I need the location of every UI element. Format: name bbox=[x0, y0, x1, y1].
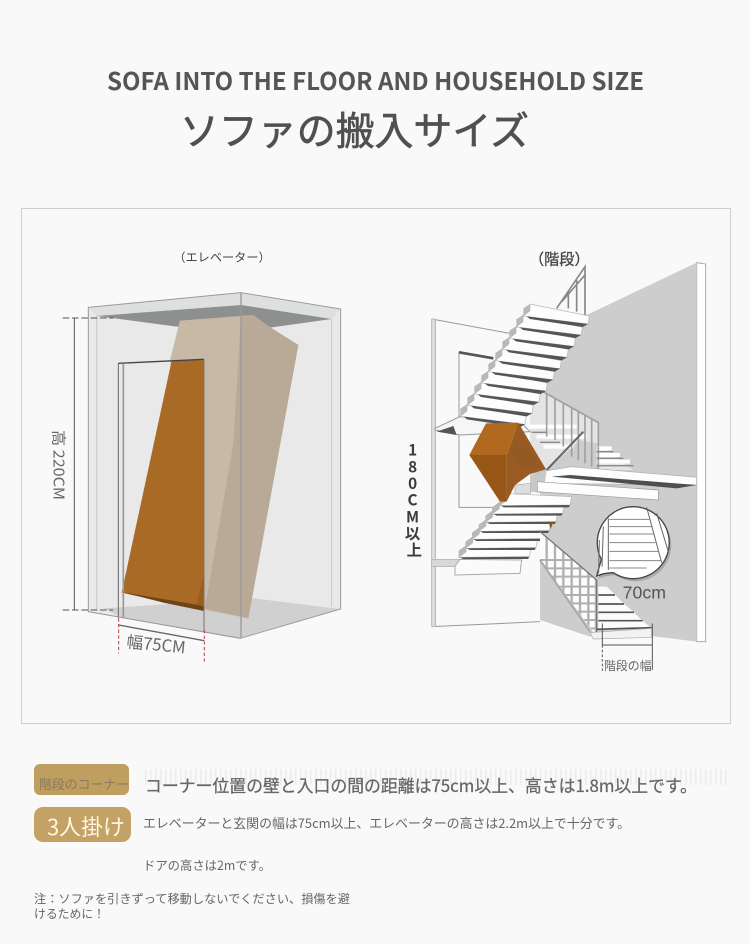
elevator cabin body bbox=[88, 293, 341, 638]
panel: elevator diagram bbox=[48, 249, 341, 663]
label: stairs: （階段） bbox=[529, 248, 590, 270]
top railing bbox=[557, 267, 585, 315]
left wall outline bbox=[432, 319, 540, 627]
height dimension line bbox=[63, 318, 113, 610]
label: width 75cm: 幅75CM bbox=[125, 628, 187, 659]
elevator floor bbox=[103, 598, 340, 637]
middle railing and back flight bbox=[530, 390, 633, 470]
text: corner requirement: コーナー位置の壁と入口の間の距離は75cm以上、高さは1.8m以上です。 bbox=[145, 772, 697, 797]
upper stair flight bbox=[460, 304, 589, 427]
elevator box edges bbox=[88, 293, 341, 638]
label: elevator: （エレベーター） bbox=[173, 249, 271, 266]
text: note: けるために！ bbox=[34, 905, 105, 922]
label: 180cm or more: M bbox=[406, 505, 419, 527]
title: japanese heading: ソファの搬入サイズ bbox=[180, 101, 529, 157]
text: note bbox=[34, 890, 350, 922]
label: 180cm or more: 0 bbox=[408, 472, 417, 494]
label: height 220cm: 高 220CM bbox=[48, 430, 69, 500]
title: english heading: SOFA INTO THE FLOOR AND HOUSEHOLD SIZE bbox=[107, 63, 644, 98]
upper landing bbox=[435, 417, 530, 435]
badge: stair corner: 階段のコーナー bbox=[39, 774, 129, 793]
label: 180cm or more: 1 bbox=[408, 439, 417, 461]
label: 180cm or more: 上 bbox=[407, 539, 422, 561]
label: 70cm: 70cm bbox=[623, 582, 666, 602]
width dimension line bbox=[119, 618, 204, 663]
label: 180cm or more: 以 bbox=[405, 522, 421, 544]
panel: stairs diagram bbox=[405, 248, 706, 674]
lower stair flight bbox=[432, 494, 572, 575]
sofa box behind door bbox=[170, 315, 298, 618]
label: 180cm or more: C bbox=[408, 489, 418, 511]
label: 180cm or more: 8 bbox=[408, 455, 417, 477]
background artifact behind first line bbox=[145, 769, 730, 785]
door frame bbox=[118, 359, 204, 632]
callout bubble: stair width bbox=[597, 507, 671, 581]
badge: stair corner bbox=[34, 764, 129, 795]
label: stair width: 階段の幅 bbox=[604, 657, 652, 674]
stair width dimension bbox=[602, 623, 652, 672]
badge: three seater: 3人掛け bbox=[47, 810, 125, 842]
panel: diagram frame bbox=[22, 208, 730, 724]
elevator ceiling bbox=[88, 293, 341, 330]
lower railing grid bbox=[540, 527, 597, 640]
text: note: 注：ソファを引きずって移動しないでください、損傷を避 bbox=[34, 890, 350, 907]
lower right stair steps bbox=[590, 587, 652, 639]
main landing slab bbox=[515, 467, 697, 500]
right grey wall bbox=[540, 263, 706, 642]
sofa box through door bbox=[122, 359, 204, 611]
orange sofa box on stairs bbox=[469, 423, 553, 529]
text: elevator requirement: エレベーターと玄関の幅は75cm以上、エレベーターの高さは2.2m以上で十分です。 bbox=[143, 813, 630, 832]
text: door height: ドアの高さは2mです。 bbox=[143, 855, 271, 874]
